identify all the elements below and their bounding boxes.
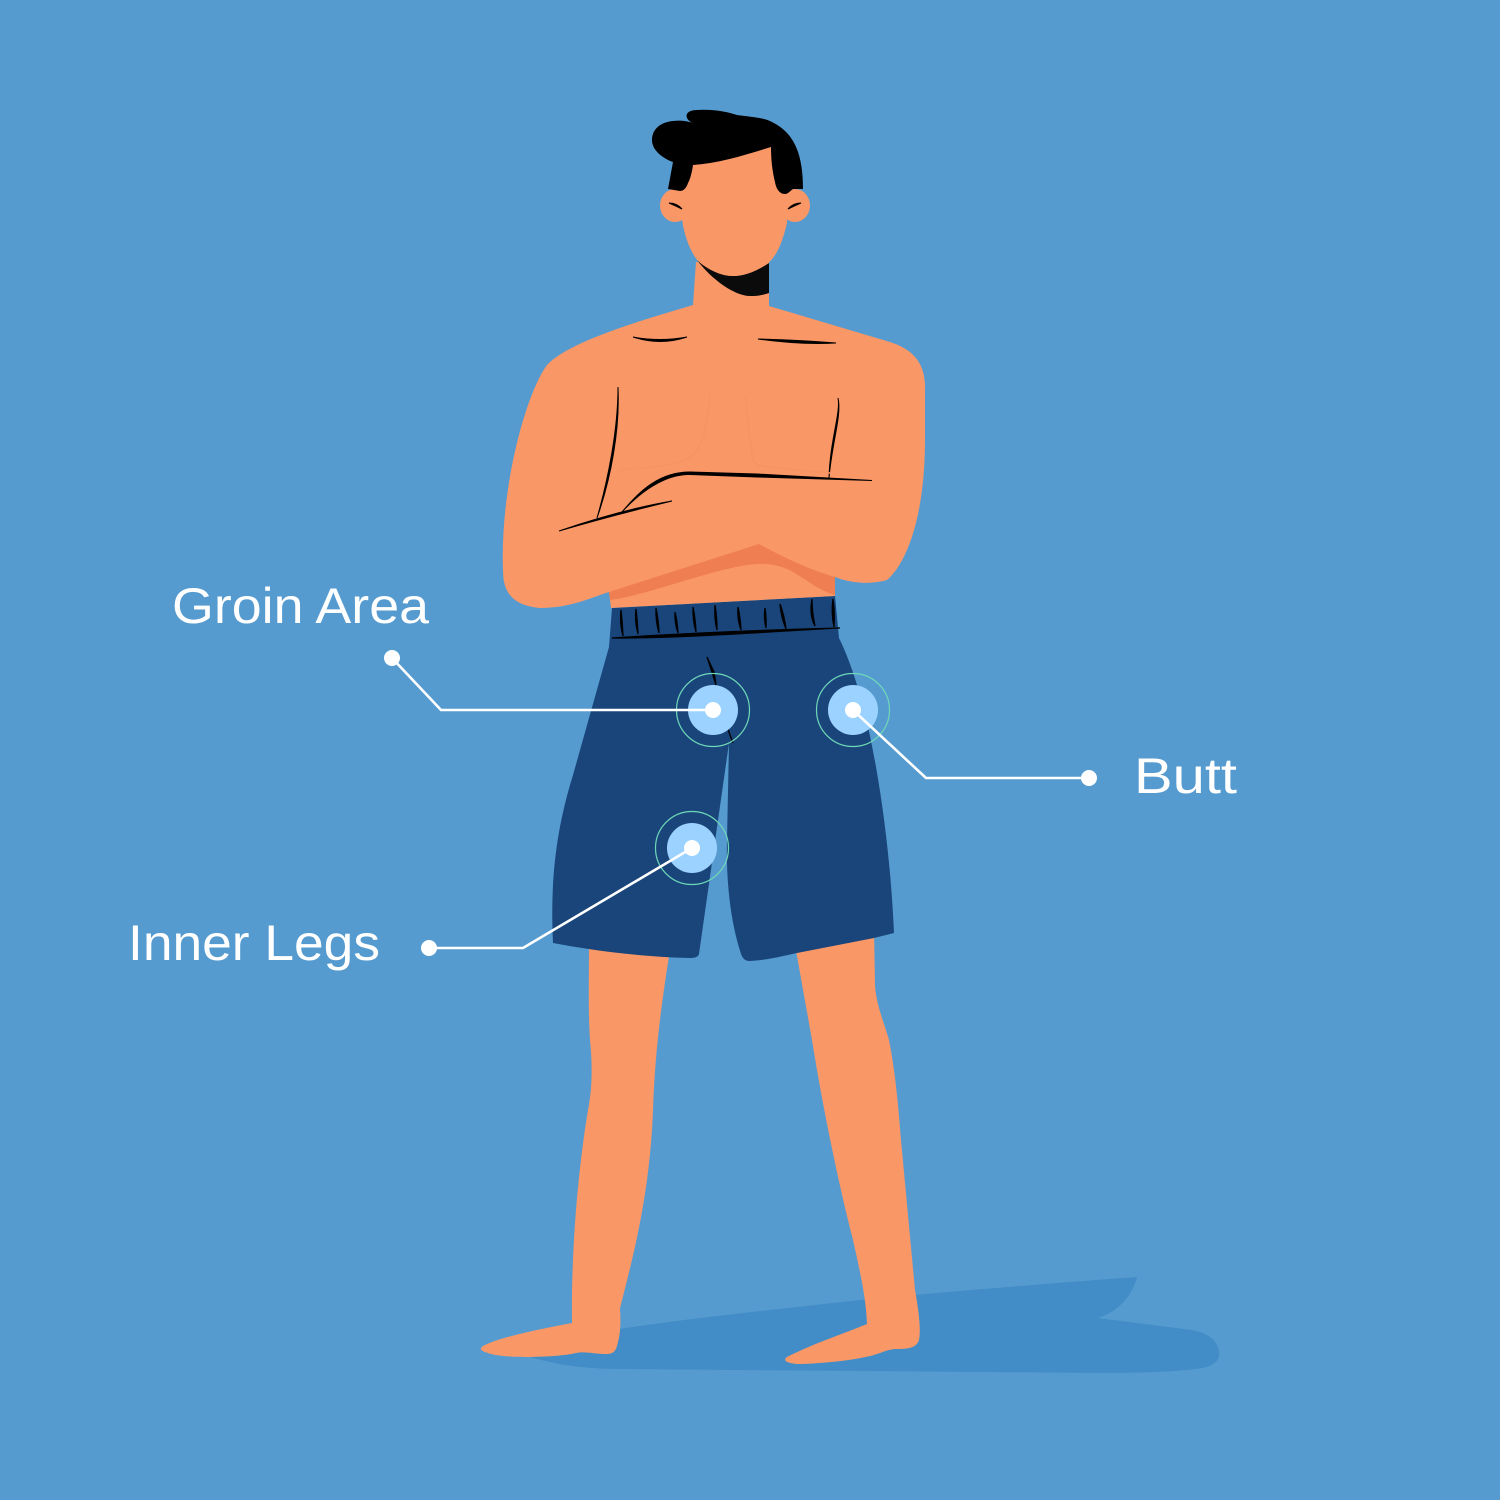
label: inner legs: Inner Legs <box>128 915 380 971</box>
callout line: groin area <box>384 650 713 710</box>
torso and crossed arms <box>503 262 925 608</box>
faint chest lines <box>620 390 830 473</box>
legs <box>481 930 920 1364</box>
floor shadow <box>530 1277 1219 1373</box>
neck shadow <box>697 260 769 296</box>
callout line: inner legs <box>421 848 692 956</box>
marker: inner legs <box>656 812 728 884</box>
ears <box>660 189 810 222</box>
shorts <box>552 596 894 961</box>
face <box>680 140 788 276</box>
label: butt: Butt <box>1134 748 1237 804</box>
forearm shadow <box>609 544 835 600</box>
marker: butt <box>816 674 890 746</box>
body lines <box>559 203 872 531</box>
hair <box>652 110 803 194</box>
marker: groin area <box>676 674 750 746</box>
waistband folds <box>612 599 840 743</box>
man figure <box>481 110 925 1364</box>
callout line: butt <box>853 710 1097 786</box>
label: groin area: Groin Area <box>172 578 429 634</box>
